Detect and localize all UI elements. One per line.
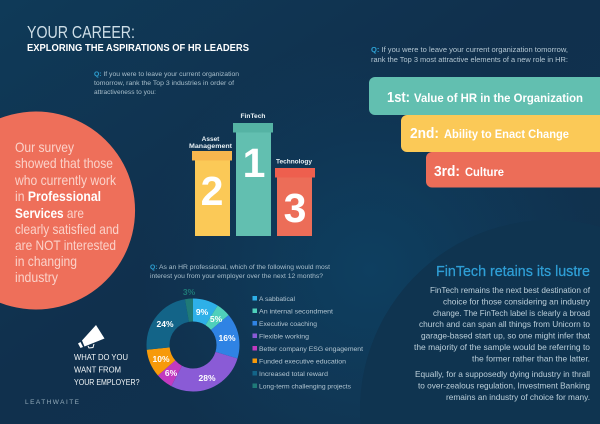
callout: what do you want: WHAT DO YOU [74,352,128,362]
heading: FinTech retains its lustre [436,264,590,280]
ranking bar: 3rd: Culture [465,167,504,179]
donut chart: 6% [165,368,178,378]
legend: Executive coaching [259,321,317,328]
body text: change. The FinTech label is clearly a broad [433,309,590,318]
question: attractive elements: rank the Top 3 most attractive elements of a new role in HR: [371,57,568,64]
donut chart: 28% [198,373,216,383]
donut chart: 3% [183,287,196,297]
donut chart: 24% [156,319,174,329]
logo: Leathwaite: LEATHWAITE [25,399,80,406]
title: YOUR CAREER: [27,22,135,42]
question: employer [150,264,330,280]
panel: survey circle: showed that those [15,155,113,171]
legend: Increased total reward [259,371,328,378]
legend: Funded executive education [259,358,346,366]
body text: choice for those considering an industry [443,298,591,306]
podium 2: Asset Management: Asset [202,136,220,143]
podium chart [189,113,315,236]
ranking bar: 1st [369,77,600,115]
donut chart: 9% [196,307,209,317]
ranking bar: 3rd [426,152,600,188]
panel: survey circle: are NOT interested [15,237,116,253]
body text: FinTech remains the next best destination of [430,286,591,295]
panel: survey circle: Services are [15,205,84,221]
podium 2: Asset Management [189,136,233,236]
podium 3: Technology: Technology [276,158,312,166]
question: top 3 industries [94,71,240,96]
title: EXPLORING THE ASPIRATIONS OF HR LEADERS [27,43,249,54]
podium 3: Technology [275,158,315,236]
body text: to over-zealous regulation, Investment Banking [418,382,590,390]
question: top 3 industries: Q: If you were to leave your current organization [94,71,240,78]
panel: survey circle [0,112,135,310]
legend: Long-term challenging projects [259,384,352,390]
panel: survey circle: in Professional [15,188,101,204]
question: employer: Q: As an HR professional, which of the following would most [150,264,330,271]
legend: Better company ESG engagement [259,346,363,353]
body text: remains an industry of choice for many. [446,393,590,402]
question: attractive elements [371,47,568,64]
podium 2: Asset Management: Management [189,143,233,150]
ranking bar: 1st: 1st: [387,89,410,106]
title [27,22,249,54]
panel: survey circle: who currently work [14,172,117,188]
question: top 3 industries: attractiveness to you: [94,89,156,96]
legend: Flexible working [259,334,309,340]
podium 3: Technology: 3 [284,185,306,231]
donut chart: 16% [218,333,236,343]
body text: the former rather than the latter. [472,354,590,364]
ranking bar: 3rd: 3rd: [434,163,460,180]
body text: Equally, for a supposedly dying industry in thrall [415,370,590,379]
question: top 3 industries: tomorrow, rank the Top 3 industries in order of [94,80,234,87]
body text: the majority of the sample would be referring to [414,343,590,352]
podium 1: FinTech: 1 [243,140,265,186]
donut chart [152,287,236,383]
panel: FinTech retains its lustre [414,264,591,402]
callout: what do you want [74,352,140,387]
panel: survey circle: clearly satisfied and [15,221,119,237]
podium 1: FinTech [233,113,273,236]
question: attractive elements: Q: If you were to leave your current organization tomorrow, [371,47,568,54]
callout: what do you want: WANT FROM [74,364,121,374]
ranking bar: 2nd [401,115,600,152]
legend: A sabbatical [259,296,295,303]
panel: survey circle: industry [15,269,58,285]
body text [414,286,591,402]
podium 2: Asset Management: 2 [201,168,223,214]
ranking bar: 1st: Value of HR in the Organization [414,93,583,105]
legend [252,296,363,390]
legend: An internal secondment [259,308,333,316]
donut chart: 5% [210,314,223,324]
question: employer: interest you from your employer over the next 12 months? [150,273,324,280]
panel: survey circle: Our survey [15,139,74,155]
callout: what do you want: YOUR EMPLOYER? [74,377,140,387]
ranking bar: 2nd: 2nd: [410,125,439,142]
icon: megaphone [78,325,104,348]
ranking bar: 2nd: Ability to Enact Change [444,129,569,141]
donut chart: 10% [152,354,170,364]
body text: garage-based start up, so one might infer that [421,332,591,340]
body text: church and can span all things from Unicorn to [419,320,590,329]
panel: survey circle: in changing [15,253,77,269]
podium 1: FinTech: FinTech [240,113,266,120]
